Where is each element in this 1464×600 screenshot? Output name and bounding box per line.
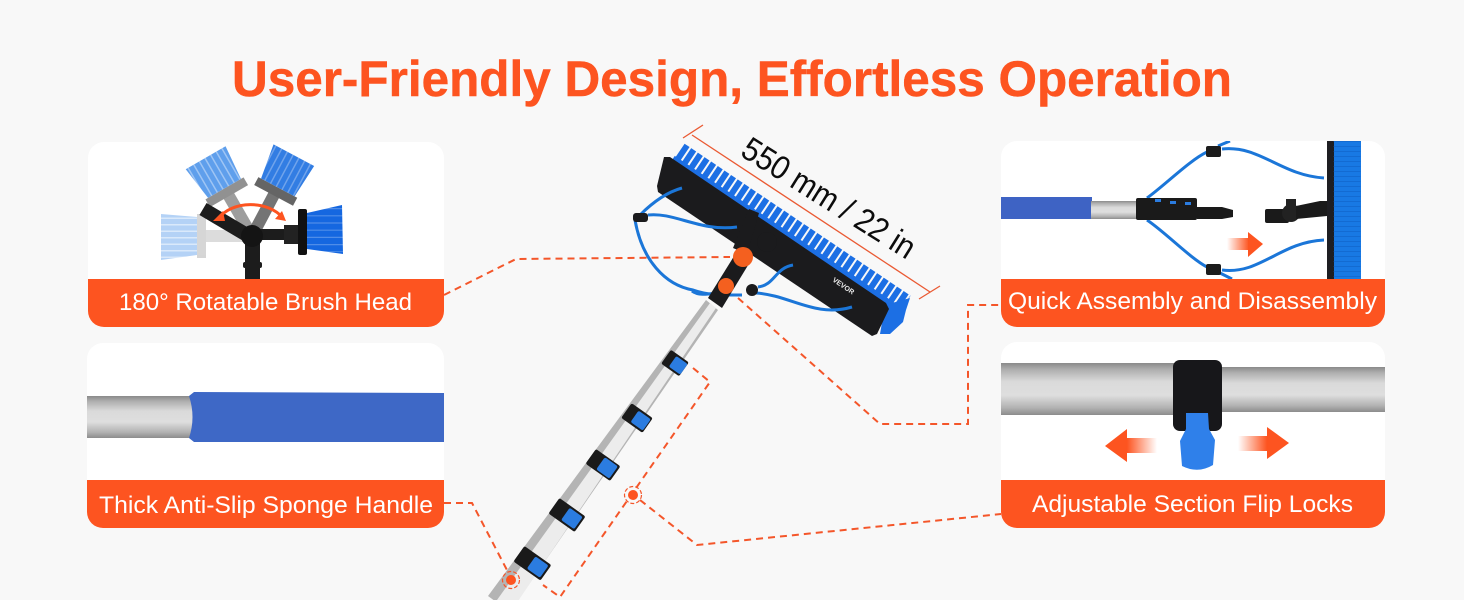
arrow: assemble xyxy=(1227,232,1263,257)
icon: flip lock clamp xyxy=(1173,360,1222,431)
flip lock 2 xyxy=(621,403,653,433)
banner xyxy=(88,279,444,327)
panel: flip locks xyxy=(1001,342,1385,528)
banner xyxy=(1001,279,1385,327)
panel: quick assembly xyxy=(1001,141,1385,327)
icon: active brush xyxy=(203,205,343,284)
banner xyxy=(1001,480,1385,528)
icon: silver tube xyxy=(1091,201,1137,219)
flip lock 3 xyxy=(586,449,620,481)
icon: blue sponge grip xyxy=(189,392,444,442)
icon: rotation arrow xyxy=(213,205,286,221)
label: 180° Rotatable Brush Head xyxy=(119,289,412,316)
swivel joint xyxy=(708,209,777,308)
arrow: left xyxy=(1105,429,1157,462)
icon: foam grip xyxy=(1001,197,1092,219)
icon: blue lever xyxy=(1180,413,1215,470)
bristles xyxy=(672,152,910,334)
icon: pole tip connector xyxy=(1136,198,1233,220)
title: User-Friendly Design, Effortless Operation xyxy=(232,51,1232,107)
VEVOR label: VEVOR xyxy=(831,277,855,296)
icon: faded brush positions xyxy=(161,144,314,260)
flip lock 4 xyxy=(548,498,586,532)
label: Thick Anti-Slip Sponge Handle xyxy=(99,492,433,519)
label: Quick Assembly and Disassembly xyxy=(1008,288,1377,315)
flip lock 1 xyxy=(661,350,689,376)
icon: brush edge xyxy=(1327,141,1361,281)
icon: silver pole xyxy=(87,396,193,438)
icon: brush connector xyxy=(1265,199,1327,223)
dimension: 550 mm / 22 in: 550 mm / 22 in xyxy=(735,130,923,266)
panel: sponge handle xyxy=(87,392,444,528)
panel: rotatable brush head xyxy=(88,142,444,327)
callout marker: flip locks xyxy=(624,486,642,504)
callout lines xyxy=(444,257,1001,597)
icon: pole sections xyxy=(1001,363,1385,415)
label: Adjustable Section Flip Locks xyxy=(1032,491,1353,518)
board xyxy=(657,157,889,336)
brush head xyxy=(633,152,910,336)
callout marker: pole lower xyxy=(502,572,520,588)
hoses xyxy=(633,188,852,310)
icon: hoses xyxy=(1147,141,1324,279)
banner xyxy=(87,480,444,528)
flip lock 5 xyxy=(513,546,551,581)
arrow: right xyxy=(1238,427,1289,459)
dimension: 550 mm / 22 in xyxy=(683,125,940,299)
telescopic pole xyxy=(488,300,718,600)
